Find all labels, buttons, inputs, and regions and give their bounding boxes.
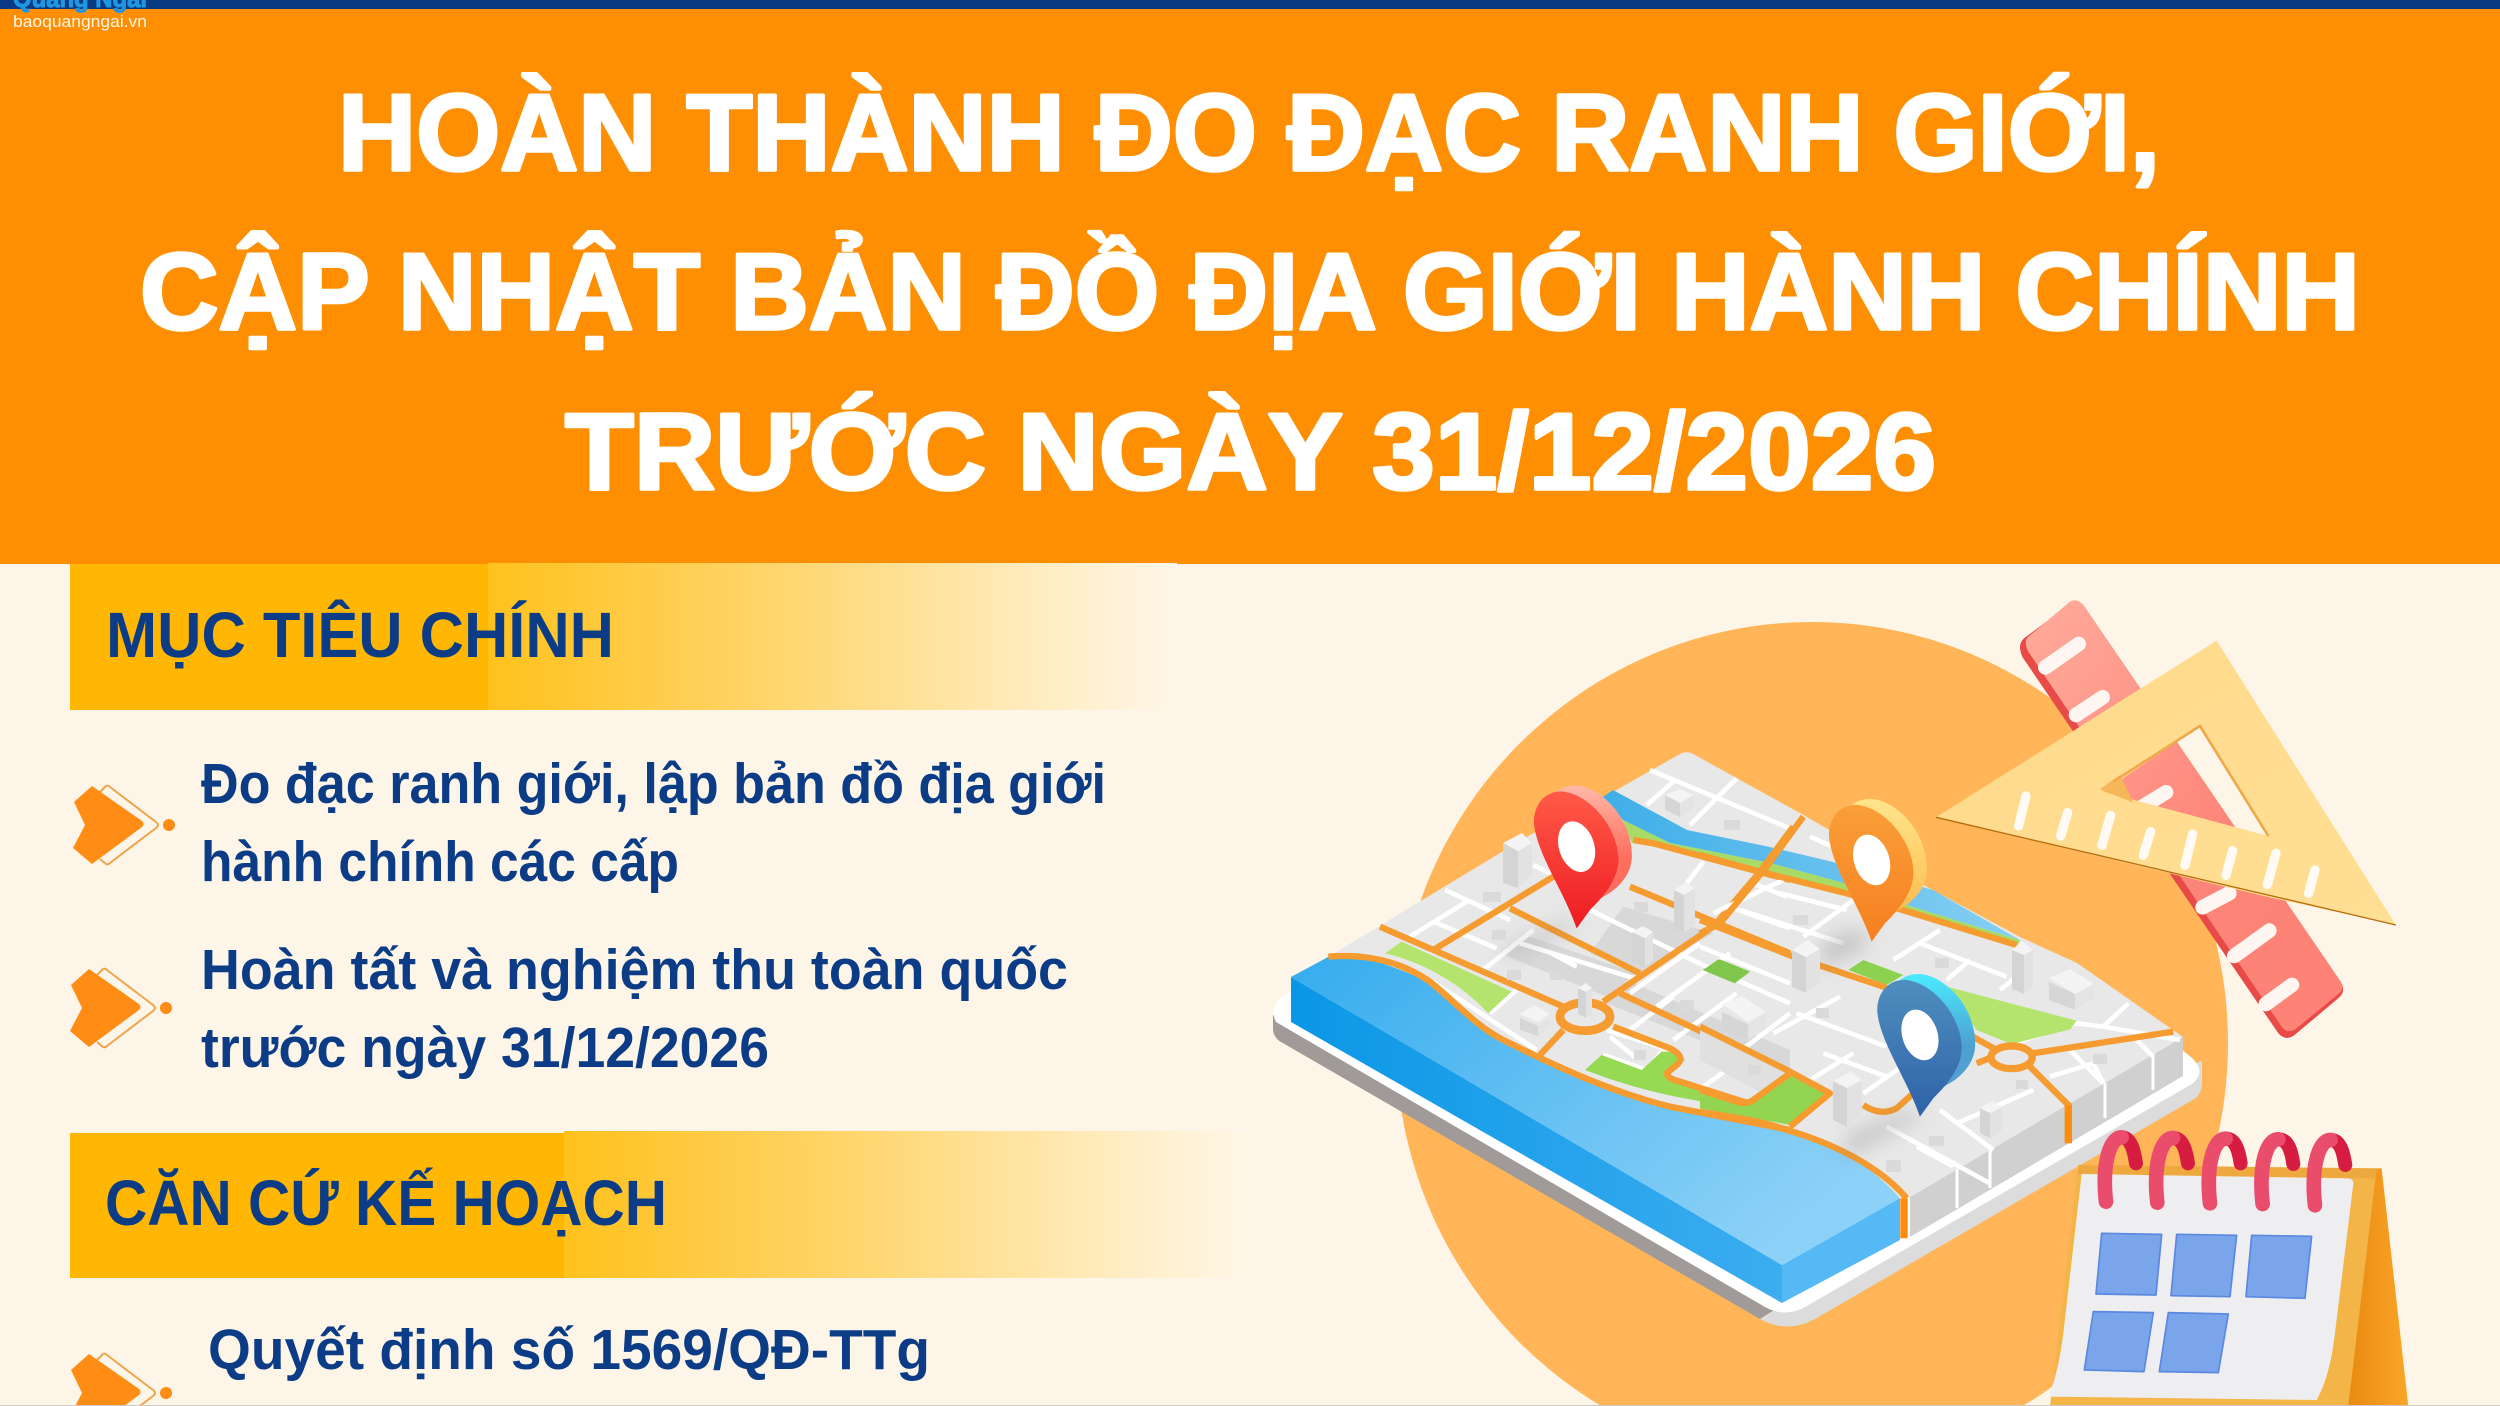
orange roads: [1700, 817, 2173, 1238]
text: objective 1: hành chính các cấp: [201, 830, 679, 894]
text: objective 2: trước ngày 31/12/2026: [201, 1016, 769, 1080]
white streets: [1410, 770, 1790, 1087]
streets and parks, left half: [1328, 770, 1793, 1130]
pin: blue: [1877, 974, 1975, 1117]
logo watermark: baoquangngai.vn: [13, 12, 147, 31]
heading: can cu ke hoach: [70, 1131, 1251, 1278]
calendar rings: [2105, 1137, 2345, 1205]
pin shadows: [1500, 920, 1920, 1160]
title: [140, 72, 2360, 513]
streets and parks, right half: [1700, 817, 2180, 1238]
white streets: [1713, 837, 2180, 1183]
calendar page: [2048, 1174, 2353, 1400]
land surface: [1328, 752, 2183, 1198]
heading: muc tieu chinh: MỤC TIÊU CHÍNH: [106, 598, 614, 671]
river bank green: [1623, 820, 2020, 947]
text: objective 2: Hoàn tất và nghiệm thu toàn quốc: [201, 938, 1068, 1002]
bullet icon 1: [73, 786, 175, 864]
pin: orange: [1829, 799, 1927, 942]
river: [1603, 790, 2020, 940]
parks: [1700, 959, 2077, 1125]
header band: [0, 0, 2500, 564]
calendar stand: [2347, 1168, 2408, 1406]
calendar day tiles: [2084, 1233, 2312, 1373]
text: objective 2: [201, 938, 1068, 1080]
icon: desk calendar: [2048, 1137, 2408, 1406]
text: objective 1: Đo đạc ranh giới, lập bản đồ địa giới: [201, 752, 1106, 816]
ruler: [2020, 600, 2343, 1038]
tall towers: [1503, 833, 2033, 1138]
calendar back board: [2050, 1165, 2377, 1406]
city block shading: [1500, 907, 1790, 1077]
city block shading: [1700, 1027, 1830, 1117]
map illustration: [0, 752, 2500, 1406]
low blocks: [1483, 789, 2107, 1172]
pin: red: [1534, 786, 1632, 928]
heading: muc tieu chinh: [70, 563, 1177, 710]
heading: can cu ke hoach: CĂN CỨ KẾ HOẠCH: [105, 1167, 667, 1239]
bullet icon 3: [70, 1354, 172, 1406]
title: TRƯỚC NGÀY 31/12/2026: [565, 391, 1936, 513]
orange roads: [1328, 827, 1793, 1130]
map base slab: [1273, 985, 2202, 1326]
bottom edge line: [0, 1405, 2500, 1406]
logo watermark: [13, 0, 147, 31]
icon: ruler and set square: [1936, 600, 2396, 1038]
illustration disc: [1396, 622, 2228, 1406]
water block: [1291, 956, 1900, 1303]
title: HOÀN THÀNH ĐO ĐẠC RANH GIỚI,: [338, 72, 2160, 194]
bullet icon 2: [70, 969, 172, 1047]
parks: [1385, 942, 1790, 1123]
text: objective 1: [201, 752, 1106, 894]
land side face: [1910, 1037, 2183, 1237]
title: CẬP NHẬT BẢN ĐỒ ĐỊA GIỚI HÀNH CHÍNH: [140, 231, 2360, 353]
set square: [1936, 641, 2396, 925]
buildings: [1483, 789, 2107, 1172]
text: decision: Quyết định số 1569/QĐ-TTg: [208, 1318, 930, 1382]
